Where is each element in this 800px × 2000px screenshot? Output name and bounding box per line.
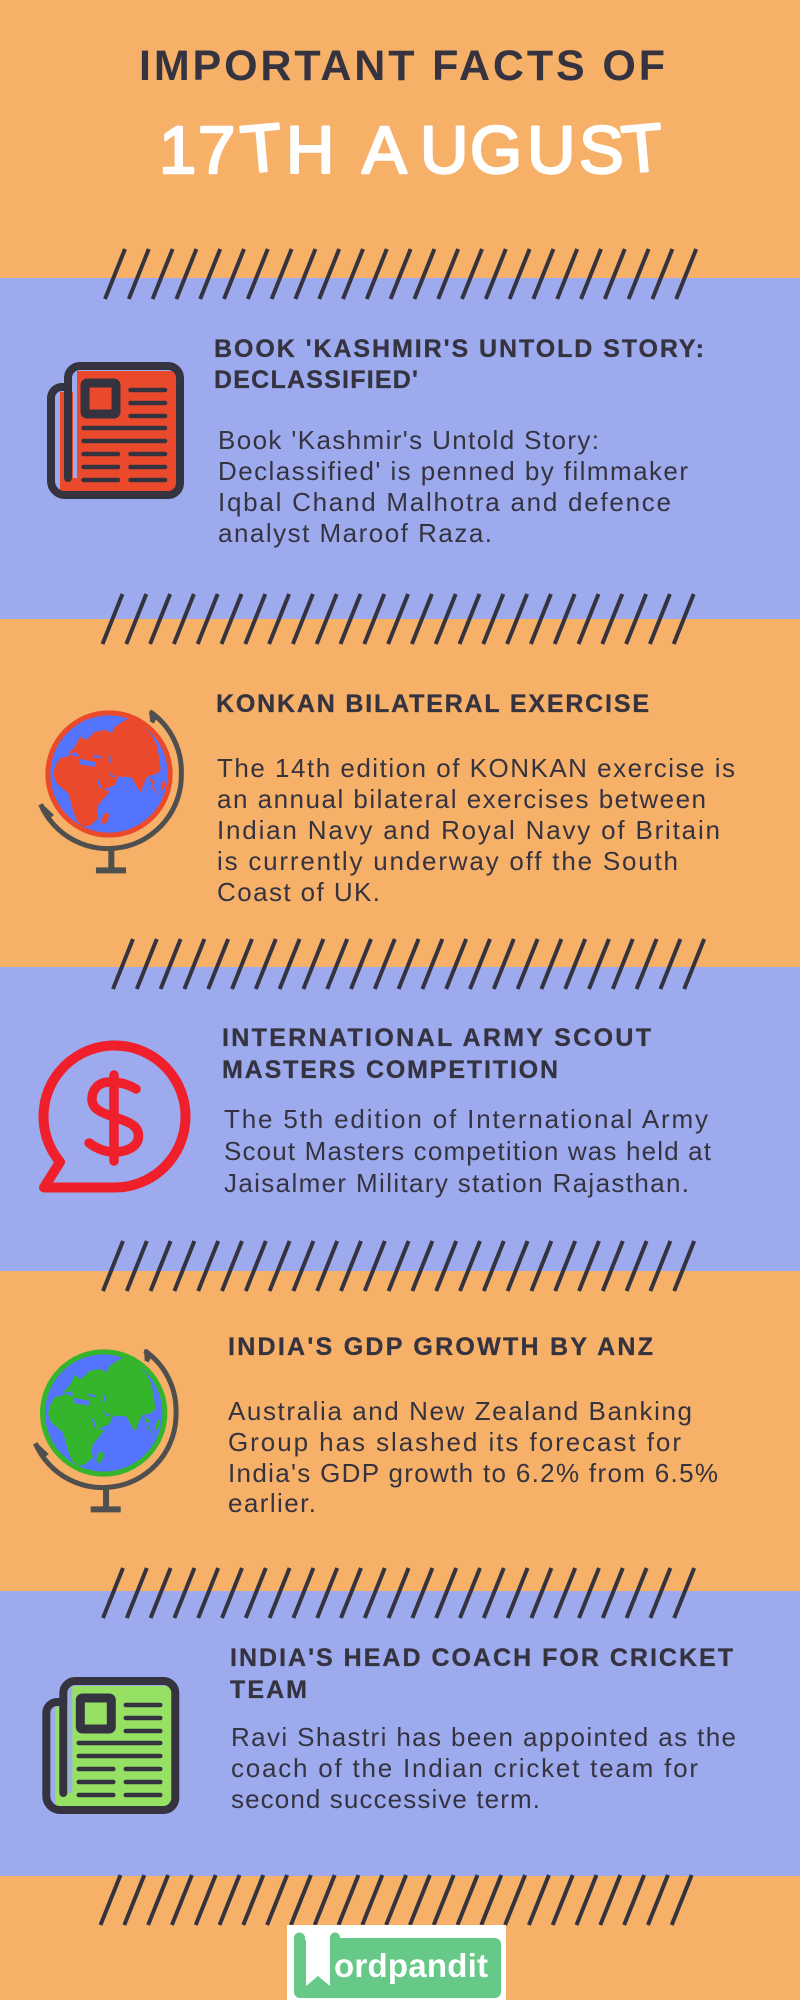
panel: scout masters (44, 1024, 712, 1198)
panel: konkan (40, 690, 735, 907)
text: scout masters: Scout Masters competition was held at (224, 1136, 712, 1166)
text: book: Book 'Kashmir's Untold Story: (218, 425, 599, 455)
text: scout masters: Jaisalmer Military station Rajasthan. (224, 1168, 689, 1198)
text: head coach: coach of the Indian cricket team for (231, 1753, 698, 1783)
text: konkan: is currently underway off the South (217, 846, 678, 876)
text: gdp: earlier. (228, 1488, 316, 1518)
icon: dollar speech bubble (44, 1046, 186, 1188)
panel: head coach (46, 1644, 736, 1814)
text: konkan: Coast of UK. (217, 877, 380, 907)
logo: wordpandit (287, 1925, 506, 2000)
text: konkan: The 14th edition of KONKAN exercise is (217, 753, 735, 783)
text: head coach: Ravi Shastri has been appointed as the (231, 1722, 736, 1752)
heading: konkan: KONKAN BILATERAL EXERCISE (216, 690, 649, 718)
icon: globe red (40, 710, 181, 873)
icon: globe green (35, 1349, 176, 1512)
heading: gdp: INDIA'S GDP GROWTH BY ANZ (228, 1333, 653, 1361)
title: IMPORTANT FACTS OF (139, 42, 665, 90)
text: head coach: second successive term. (231, 1784, 540, 1814)
text: konkan: an annual bilateral exercises between (217, 784, 706, 814)
text: gdp: India's GDP growth to 6.2% from 6.5% (228, 1458, 718, 1488)
heading: scout masters: INTERNATIONAL ARMY SCOUT (222, 1024, 651, 1052)
text: book: analyst Maroof Raza. (218, 518, 492, 548)
icon: newspaper red (51, 366, 180, 495)
text: konkan: Indian Navy and Royal Navy of Britain (217, 815, 720, 845)
text: book: Iqbal Chand Malhotra and defence (218, 487, 671, 517)
heading: book: BOOK 'KASHMIR'S UNTOLD STORY: (214, 335, 704, 363)
text: scout masters: The 5th edition of International Army (224, 1104, 708, 1134)
panel: gdp (35, 1333, 718, 1518)
subtitle: date: 17TH AUGUST (159, 110, 666, 188)
logo: wordpandit: ordpandit (334, 1947, 488, 1984)
icon: newspaper green (46, 1681, 175, 1810)
heading: scout masters: MASTERS COMPETITION (222, 1056, 558, 1084)
panel: book (51, 335, 704, 548)
text: gdp: Australia and New Zealand Banking (228, 1396, 692, 1426)
heading: book: DECLASSIFIED' (214, 366, 418, 394)
heading: head coach: TEAM (230, 1676, 307, 1704)
heading: head coach: INDIA'S HEAD COACH FOR CRICKET (230, 1644, 733, 1672)
text: book: Declassified' is penned by filmmaker (218, 456, 688, 486)
text: gdp: Group has slashed its forecast for (228, 1427, 681, 1457)
